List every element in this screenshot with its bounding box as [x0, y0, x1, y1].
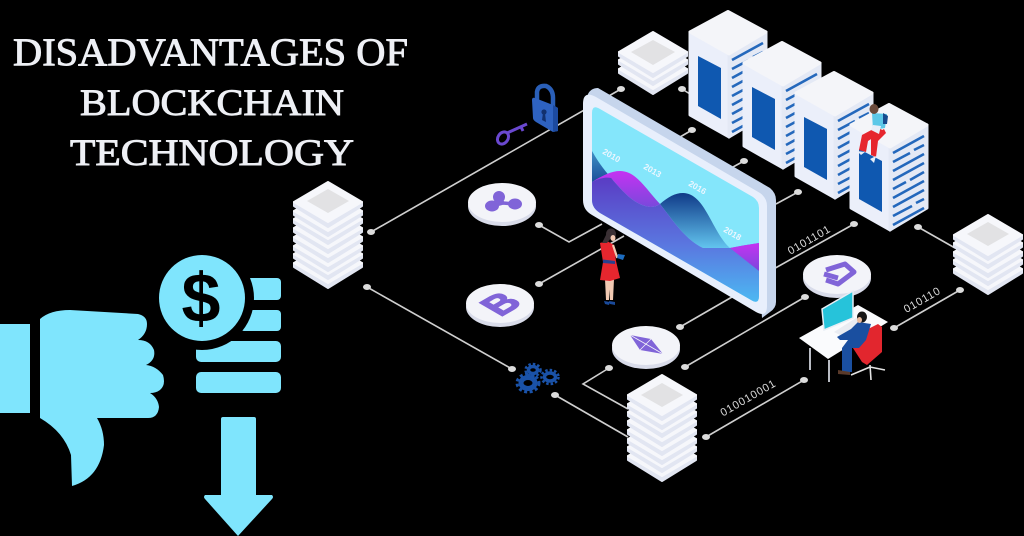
binary labels	[719, 223, 943, 419]
stack: right	[954, 215, 1022, 294]
coin: ripple	[468, 183, 536, 226]
dollar coin: $	[182, 259, 220, 337]
title: TECHNOLOGY	[70, 133, 354, 174]
title: BLOCKCHAIN	[80, 83, 344, 124]
title: DISADVANTAGES OF	[13, 31, 408, 74]
thumbs-down hand	[40, 310, 164, 486]
icon: gears	[517, 364, 558, 392]
figure: man on server	[857, 104, 888, 163]
icon: key	[495, 124, 527, 146]
coin: bitcoin: B	[471, 286, 532, 322]
connector lines	[367, 89, 960, 437]
stack: bottom	[628, 375, 696, 481]
chart year labels	[601, 146, 743, 243]
chart year labels: 2010	[601, 146, 622, 165]
stacked bars	[196, 278, 281, 393]
icon: thumbs down with coin and arrow	[0, 246, 281, 536]
coin: dash	[803, 255, 871, 298]
man body	[837, 322, 871, 372]
desk	[799, 305, 888, 359]
chair	[851, 324, 882, 365]
computer screen	[822, 291, 853, 330]
chart year labels: 2016	[687, 178, 708, 197]
dollar coin	[150, 246, 254, 350]
down arrow	[204, 417, 273, 536]
chart screen	[592, 107, 759, 302]
servers row	[690, 12, 927, 230]
chart year labels: 2018	[722, 224, 743, 243]
stack: left	[294, 182, 362, 288]
figure: man at desk	[799, 291, 888, 382]
chart year labels: 2013	[642, 161, 663, 180]
figure: woman in red dress	[600, 228, 625, 305]
binary labels: 0101101	[786, 223, 833, 258]
binary labels: 010010001	[719, 378, 778, 419]
sleeve cuff	[0, 324, 30, 413]
title	[13, 31, 408, 174]
stack: top small	[619, 32, 687, 94]
coin: ethereum	[612, 326, 680, 369]
binary labels: 010110	[902, 285, 943, 316]
chart monitor	[583, 88, 776, 318]
icon: padlock	[532, 86, 558, 132]
connector end dots	[363, 86, 964, 440]
